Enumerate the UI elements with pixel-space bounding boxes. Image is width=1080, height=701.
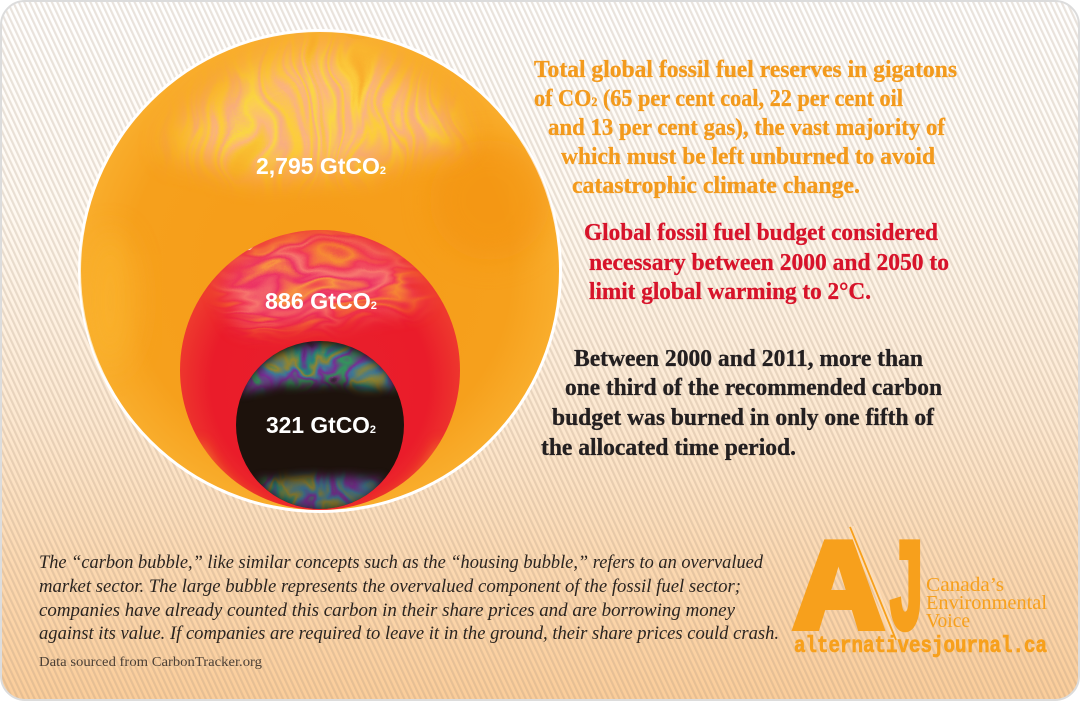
logo: Alternatives Journal: [794, 521, 1048, 668]
logo tagline: Voice: [926, 611, 970, 632]
text block: burned so far: [541, 346, 942, 461]
text block: burned so far: Between 2000 and 2011, more than: [574, 346, 923, 372]
explanatory paragraph: The “carbon bubble,” like similar concepts such as the “housing bubble,” refers to an overvalued: [39, 552, 763, 573]
red bubble: [180, 230, 460, 512]
explanatory paragraph: companies have already counted this carbon in their share prices and are borrowing money: [39, 600, 736, 621]
logo: Alternatives Journal: J: [888, 521, 925, 668]
text block: fossil fuel budget: necessary between 2000 and 2050 to: [589, 250, 949, 276]
label: 886 GtCO2: 886 GtCO2: [265, 288, 377, 314]
explanatory paragraph: [39, 552, 779, 644]
logo tagline: [926, 575, 1048, 632]
text block: fossil fuel budget: [584, 220, 949, 305]
text block: total reserves: and 13 per cent gas), the vast majority of: [548, 115, 946, 141]
text block: burned so far: budget was burned in only one fifth of: [552, 405, 935, 431]
text block: total reserves: of CO2 (65 per cent coal, 22 per cent oil: [534, 86, 903, 112]
logo letters AJ: [796, 521, 925, 668]
bubble chart: nested carbon bubbles: [78, 29, 562, 520]
explanatory paragraph: against its value. If companies are required to leave it in the ground, their share prices could crash.: [39, 623, 779, 644]
logo letters AJ: A: [796, 521, 882, 668]
text block: burned so far: one third of the recommended carbon: [565, 375, 942, 401]
label: 321 GtCO2: 321 GtCO2: [266, 412, 376, 438]
black bubble: [236, 341, 404, 510]
source note: Data sourced from CarbonTracker.org: [39, 655, 262, 670]
text block: total reserves: Total global fossil fuel reserves in gigatons: [534, 57, 957, 83]
text block: total reserves: catastrophic climate change.: [572, 173, 860, 199]
explanatory paragraph: market sector. The large bubble represents the overvalued component of the fossil fuel sector;: [39, 576, 741, 597]
text block: fossil fuel budget: limit global warming to 2°C.: [589, 279, 871, 305]
text block: total reserves: [534, 57, 957, 199]
text block: total reserves: which must be left unburned to avoid: [561, 144, 936, 170]
text block: fossil fuel budget: Global fossil fuel budget considered: [584, 220, 939, 246]
label: 2,795 GtCO2: 2,795 GtCO2: [256, 153, 386, 179]
logo tagline: Canada’s: [926, 575, 1004, 596]
logo tagline: Environmental: [926, 593, 1048, 614]
large orange bubble: [78, 29, 562, 520]
text block: burned so far: the allocated time period.: [541, 435, 796, 461]
